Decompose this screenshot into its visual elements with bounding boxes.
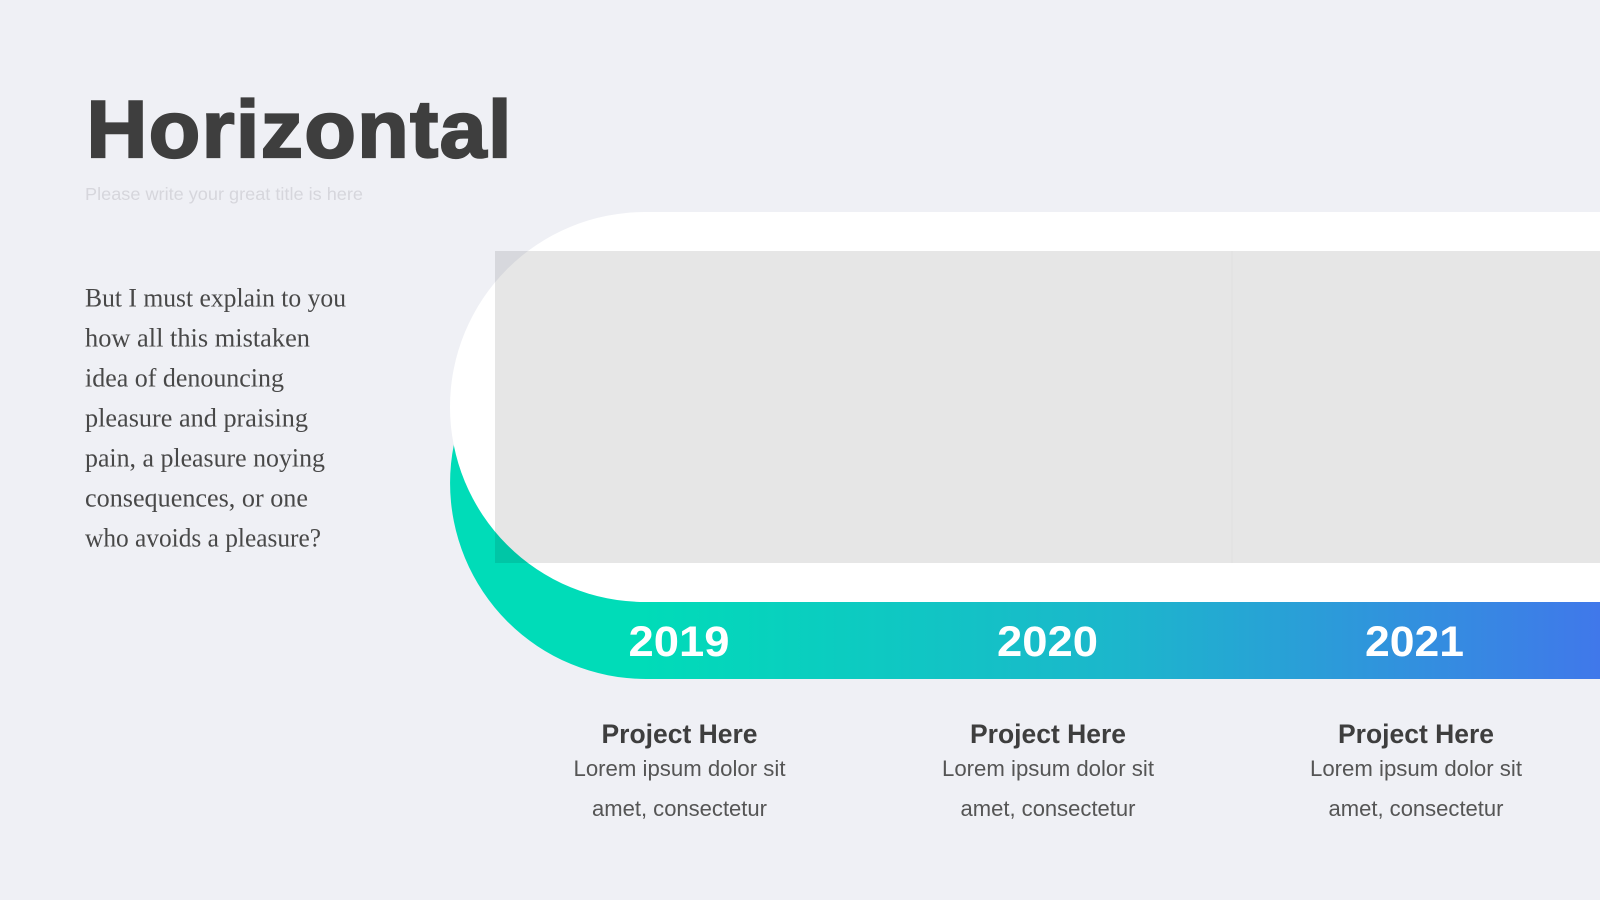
body paragraph: consequences, or one [85,482,308,512]
column: 2019 [574,618,786,821]
project 2021: amet, consectetur [1328,796,1504,821]
body paragraph: who avoids a pleasure? [85,522,321,552]
white rounded panel [450,212,1600,602]
project 2020: Lorem ipsum dolor sit [942,756,1155,781]
body paragraph: But I must explain to you [85,282,346,312]
column: 2021 [1310,618,1523,821]
project 2021: Lorem ipsum dolor sit [1310,756,1523,781]
project 2019: Project Here [602,719,758,749]
project 2020: amet, consectetur [960,796,1136,821]
body paragraph [85,282,346,552]
year 2020: 2020 [997,618,1098,666]
year 2021: 2021 [1365,618,1464,666]
project 2019 [574,719,786,821]
project 2019: amet, consectetur [592,796,767,821]
project 2020: Project Here [970,719,1126,749]
project 2021 [1310,719,1523,821]
project 2020 [942,719,1155,821]
gradient timeline band [450,287,1600,679]
column: 2020 [942,618,1155,821]
project 2019: Lorem ipsum dolor sit [574,756,786,781]
year 2019: 2019 [628,618,730,666]
body paragraph: pain, a pleasure noying [85,442,325,472]
image placeholder panel [495,251,1600,563]
body paragraph: how all this mistaken [85,322,310,352]
project 2021: Project Here [1338,719,1494,749]
body paragraph: idea of denouncing [85,362,284,392]
body paragraph: pleasure and praising [85,402,308,432]
title: Horizontal [86,83,513,175]
subtitle: Please write your great title is here [85,184,363,204]
